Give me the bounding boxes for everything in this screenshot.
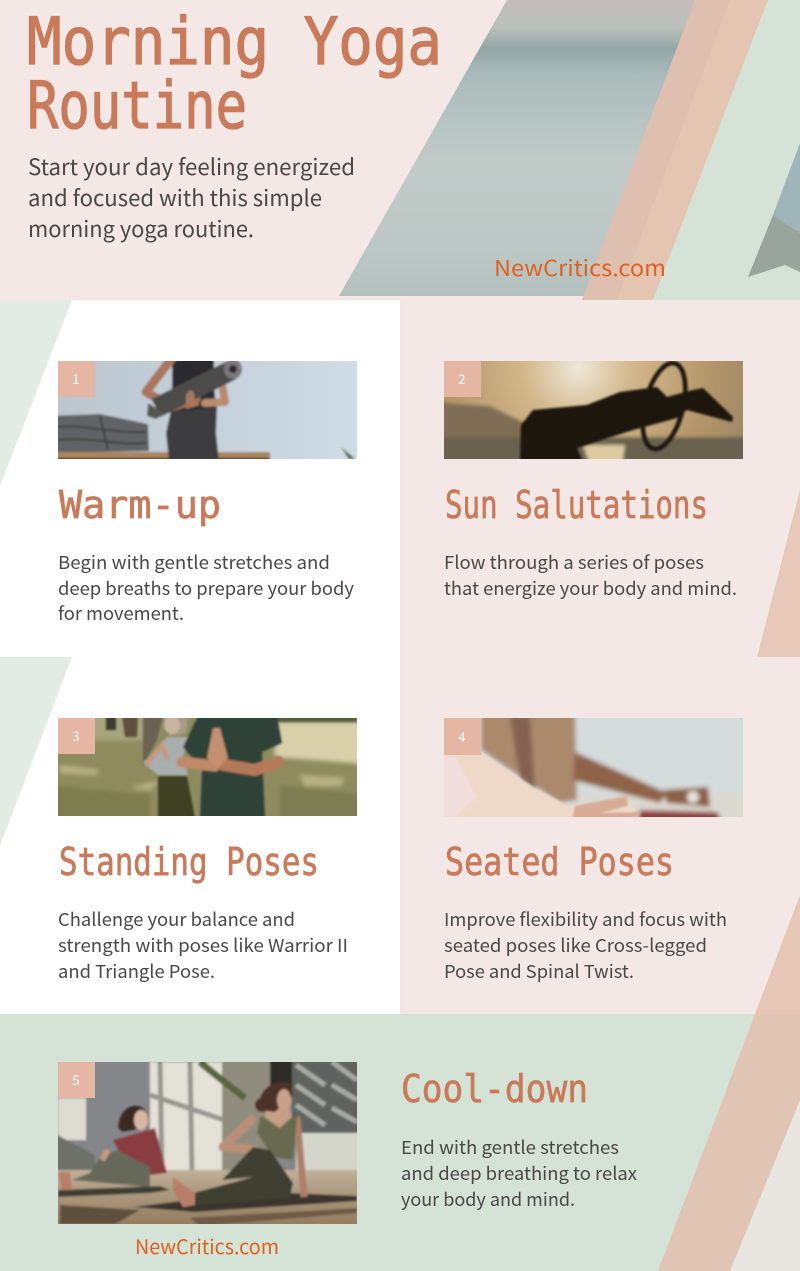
accent: peach band bbox=[658, 1014, 800, 1271]
step 5: cool-down bbox=[48, 1052, 637, 1260]
heading: Seated Poses bbox=[445, 840, 674, 884]
subtitle: and focused with this simple bbox=[28, 181, 322, 213]
step 4: seated poses bbox=[444, 718, 743, 982]
description bbox=[444, 906, 727, 984]
description: End with gentle stretches bbox=[401, 1134, 619, 1160]
heading: Warm-up bbox=[59, 483, 221, 527]
accent: mint wedge top bbox=[0, 300, 72, 486]
description bbox=[444, 549, 737, 601]
photo: silhouette with ring bbox=[444, 361, 743, 459]
description: for movement. bbox=[58, 600, 184, 626]
description: Challenge your balance and bbox=[58, 906, 295, 932]
title: Routine bbox=[27, 69, 247, 144]
number badge 5: 5 bbox=[72, 1070, 80, 1089]
number badge 1 bbox=[58, 361, 95, 397]
description: and deep breathing to relax bbox=[401, 1160, 637, 1186]
description: that energize your body and mind. bbox=[444, 575, 737, 601]
number badge 4 bbox=[444, 718, 481, 755]
panel: bottom section bbox=[0, 1014, 800, 1271]
number badge 4: 4 bbox=[458, 727, 466, 746]
photo: woman with yoga mat bbox=[58, 361, 357, 459]
accent: peach band lower bbox=[755, 895, 800, 1014]
accent: peach wedge upper bbox=[757, 490, 800, 657]
photo: meditation hands bbox=[444, 718, 743, 817]
number badge 2: 2 bbox=[458, 369, 466, 388]
description bbox=[58, 549, 355, 626]
description bbox=[401, 1134, 637, 1212]
number badge 2 bbox=[444, 361, 481, 397]
panel: left column bbox=[0, 300, 400, 1014]
header diagonal band: light peach bbox=[617, 0, 768, 300]
number badge 1: 1 bbox=[72, 369, 80, 388]
header diagonal band: mint bbox=[653, 0, 800, 300]
panel: header bbox=[0, 0, 800, 300]
title: Morning Yoga bbox=[27, 5, 442, 80]
number badge 3 bbox=[58, 718, 95, 754]
description bbox=[58, 906, 348, 984]
description: deep breaths to prepare your body bbox=[58, 575, 355, 601]
heading: Sun Salutations bbox=[445, 483, 708, 527]
description: seated poses like Cross-legged bbox=[444, 932, 707, 958]
description: Flow through a series of poses bbox=[444, 549, 704, 575]
heading: Standing Poses bbox=[59, 840, 319, 884]
description: Improve flexibility and focus with bbox=[444, 906, 727, 932]
heading: Cool-down bbox=[401, 1067, 588, 1111]
subtitle: Start your day feeling energized bbox=[28, 150, 355, 182]
header photo: misty sea bbox=[339, 0, 700, 296]
panel: right column bbox=[400, 300, 800, 1014]
number badge 3: 3 bbox=[72, 726, 80, 745]
watermark: footer: NewCritics.com bbox=[135, 1231, 279, 1260]
watermark: header: NewCritics.com bbox=[494, 251, 666, 283]
description: your body and mind. bbox=[401, 1186, 575, 1212]
number badge 5 bbox=[58, 1062, 95, 1098]
subtitle bbox=[28, 150, 355, 244]
title bbox=[27, 5, 442, 144]
accent: mint wedge middle bbox=[0, 657, 72, 846]
description: Begin with gentle stretches and bbox=[58, 549, 330, 575]
description: strength with poses like Warrior II bbox=[58, 932, 348, 958]
step 1: warm-up bbox=[58, 361, 357, 620]
description: and Triangle Pose. bbox=[58, 958, 215, 984]
photo: two women twisting in studio bbox=[58, 1062, 357, 1224]
photo: two people in park bbox=[58, 718, 357, 816]
header diagonal band: dark peach bbox=[582, 0, 735, 300]
step 2: sun salutations bbox=[444, 361, 743, 599]
header photo fragment: corner bbox=[748, 143, 800, 277]
step 3: standing poses bbox=[58, 718, 357, 982]
description: Pose and Spinal Twist. bbox=[444, 958, 634, 984]
accent: stone corner bbox=[730, 1100, 800, 1271]
subtitle: morning yoga routine. bbox=[28, 212, 254, 244]
